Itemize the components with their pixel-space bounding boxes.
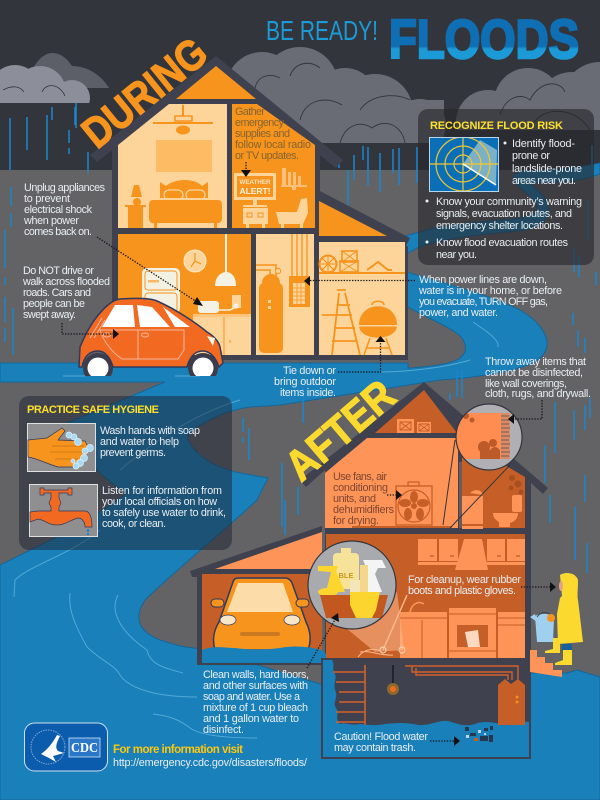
icon: radar map: [430, 137, 498, 192]
magnifier: cleaning supplies: [308, 541, 396, 629]
bullets: warning signals: Know your community’s warning: [436, 196, 582, 208]
kitchen: [326, 534, 525, 659]
text: clean walls: [203, 669, 309, 736]
bullets: warning signals: emergency shelter locations.: [436, 220, 563, 232]
upper river bend: [390, 163, 600, 262]
tv: weather alert: WEATHER: [240, 179, 271, 186]
arrow: throw away to wall: [508, 400, 542, 424]
text: listen for information: to safely use water to drink,: [102, 507, 226, 519]
garage flood water: [202, 647, 333, 665]
text: unplug appliances: comes back on.: [24, 226, 92, 238]
text: throw away: Throw away items that: [485, 356, 586, 368]
text: power lines: you evacuate, TURN OFF gas,: [419, 296, 548, 308]
storm cloud: right: [456, 62, 600, 130]
bullets: identify areas: landslide-prone: [512, 163, 582, 175]
text: clean walls: Clean walls, hard floors,: [203, 669, 309, 681]
stairs: [530, 650, 562, 677]
storm cloud: back left: [25, 53, 109, 88]
text: clean walls: disinfect.: [203, 724, 244, 736]
upper room: [325, 438, 458, 528]
text: gather supplies: supplies and: [235, 128, 290, 140]
house frame: [90, 56, 410, 360]
bullets: identify areas: areas near you.: [512, 175, 576, 187]
text: throw away: cannot be disinfected,: [485, 367, 583, 379]
panel: practice safe hygiene: [19, 396, 232, 550]
text: wash hands: prevent germs.: [100, 447, 166, 459]
icon: washing hands: [28, 424, 96, 472]
text: wash hands: and water to help: [100, 436, 179, 448]
text: throw away: cloth, rugs, and drywall.: [485, 388, 591, 400]
footer: link: http://emergency.cdc.gov/disasters/floods/: [113, 757, 307, 769]
text: unplug appliances: [23, 182, 106, 238]
bullets: evacuation routes: Know flood evacuation routes: [436, 237, 569, 249]
tv: weather alert: ALERT!: [240, 186, 271, 196]
front view car: [211, 578, 310, 650]
text: throw away: like wall coverings,: [485, 378, 567, 390]
text: listen for information: Listen for information from: [102, 485, 222, 497]
rain streaks: [5, 103, 596, 573]
water ripple lines: [14, 322, 498, 738]
text: listen for information: your local officials on how: [102, 496, 217, 508]
text: unplug appliances: Unplug appliances: [24, 182, 106, 194]
bullets: identify areas: [504, 138, 582, 187]
kitchen: [118, 234, 251, 355]
storm cloud: center: [226, 47, 446, 151]
arrow: power lines to panel: [304, 276, 415, 286]
text: wash hands: Wash hands with soap: [100, 425, 200, 437]
attic: [176, 66, 256, 99]
river and flood water: [0, 270, 600, 800]
icon: floating trash: [465, 726, 493, 742]
garage: [319, 201, 405, 355]
text: clean walls: and 1 gallon water to: [203, 713, 299, 725]
text: gather supplies: Gather: [235, 106, 265, 118]
footer: more information: For more information visit: [113, 744, 243, 756]
text: tie down: Tie down or: [283, 365, 336, 377]
bedroom: [118, 104, 227, 228]
title: be ready: BE READY!: [266, 15, 378, 46]
text: cleanup gear: boots and plastic gloves.: [408, 585, 516, 597]
text: caution: Caution! Flood water: [334, 731, 428, 743]
text: gather supplies: emergency: [235, 117, 285, 129]
text: do not drive: roads. Cars and: [23, 287, 91, 299]
car: flooded road: [79, 298, 223, 383]
text: unplug appliances: to prevent: [24, 193, 70, 205]
arrow: clean walls to supplies: [307, 613, 339, 668]
arrow: gather to tv: [241, 162, 251, 177]
text: tie down: [274, 365, 336, 399]
heading: during: DURING: [73, 29, 217, 158]
arrow: caution to trash: [430, 736, 460, 746]
bullets: evacuation routes: [426, 237, 569, 261]
arrow: cleanup to person: [521, 582, 556, 592]
icon: water tap: [30, 484, 98, 536]
text: caution: may contain trash.: [334, 742, 416, 754]
utility room: [256, 234, 314, 355]
text: power lines: [418, 274, 562, 319]
panel title: RECOGNIZE FLOOD RISK: [430, 120, 563, 132]
text: power lines: When power lines are down,: [419, 274, 547, 286]
logo: cdc: [24, 723, 108, 771]
text: gather supplies: follow local radio: [235, 139, 311, 151]
garage interior: [202, 532, 333, 665]
text: clean walls: mixture of 1 cup bleach: [203, 702, 308, 714]
text: cleanup gear: [408, 574, 521, 597]
text: cleanup gear: For cleanup, wear rubber: [408, 574, 521, 586]
bullets: warning signals: signals, evacuation routes, and: [436, 208, 572, 220]
text: use fans: dehumidifiers: [333, 504, 395, 516]
text: use fans: conditioning: [333, 482, 388, 494]
panel: recognize flood risk: [418, 109, 594, 265]
text: wash hands: [100, 425, 200, 459]
basement: [322, 659, 530, 758]
text: clean walls: soap and water. Use a: [203, 691, 300, 703]
text: power lines: water is in your home, or before: [418, 285, 562, 297]
storm cloud: front left: [0, 65, 90, 103]
house frame: [192, 382, 548, 665]
house: after the flood: [190, 382, 548, 758]
text: do not drive: walk across flooded: [22, 276, 110, 288]
text: unplug appliances: electrical shock: [24, 204, 93, 216]
text: use fans: units, and: [333, 493, 376, 505]
text: tie down: bring outdoor: [274, 376, 336, 388]
text: do not drive: swept away.: [23, 309, 76, 321]
text: use fans: Use fans, air: [333, 471, 387, 483]
room with radio and tv: [232, 104, 315, 228]
text: do not drive: Do NOT drive or: [23, 265, 94, 277]
text: gather supplies: [235, 106, 311, 162]
text: use fans: [333, 471, 395, 527]
text: power lines: power, and water.: [419, 307, 498, 319]
text: do not drive: people can be: [23, 298, 85, 310]
bathroom: [459, 440, 525, 529]
text: listen for information: cook, or clean.: [102, 518, 166, 530]
text: do not drive: [22, 265, 110, 321]
bullets: warning signals: [426, 196, 582, 232]
house: during the flood: [90, 56, 410, 360]
magnifier: cleaning supplies: BLE: [338, 571, 354, 580]
person in raincoat with bucket: [530, 573, 583, 677]
panel title: PRACTICE SAFE HYGIENE: [27, 404, 159, 416]
attic: [375, 390, 457, 433]
arrow: tie down to grill: [338, 336, 386, 372]
text: unplug appliances: when power: [23, 215, 79, 227]
text: tie down: items inside.: [280, 387, 336, 399]
logo: cdc: CDC: [71, 741, 98, 756]
icon: box fan: [396, 482, 432, 525]
garage roof: [190, 526, 322, 577]
arrow: unplug to toaster: [97, 237, 203, 306]
arrow: fans to fan: [387, 490, 402, 500]
text: throw away: [485, 356, 591, 400]
text: clean walls: and other surfaces with: [203, 680, 308, 692]
tv: weather alert: [234, 173, 276, 207]
bullets: evacuation routes: near you.: [436, 249, 477, 261]
arrow: do not drive to car: [62, 323, 119, 339]
text: caution: [334, 731, 428, 754]
text: listen for information: [102, 485, 226, 530]
text: gather supplies: or TV updates.: [235, 150, 299, 162]
magnifier: wall damage: [456, 404, 522, 470]
heading: after: AFTER: [276, 371, 405, 491]
text: use fans: for drying.: [333, 515, 379, 527]
bullets: identify areas: Identify flood-: [512, 138, 575, 150]
bullets: identify areas: prone or: [512, 150, 550, 162]
